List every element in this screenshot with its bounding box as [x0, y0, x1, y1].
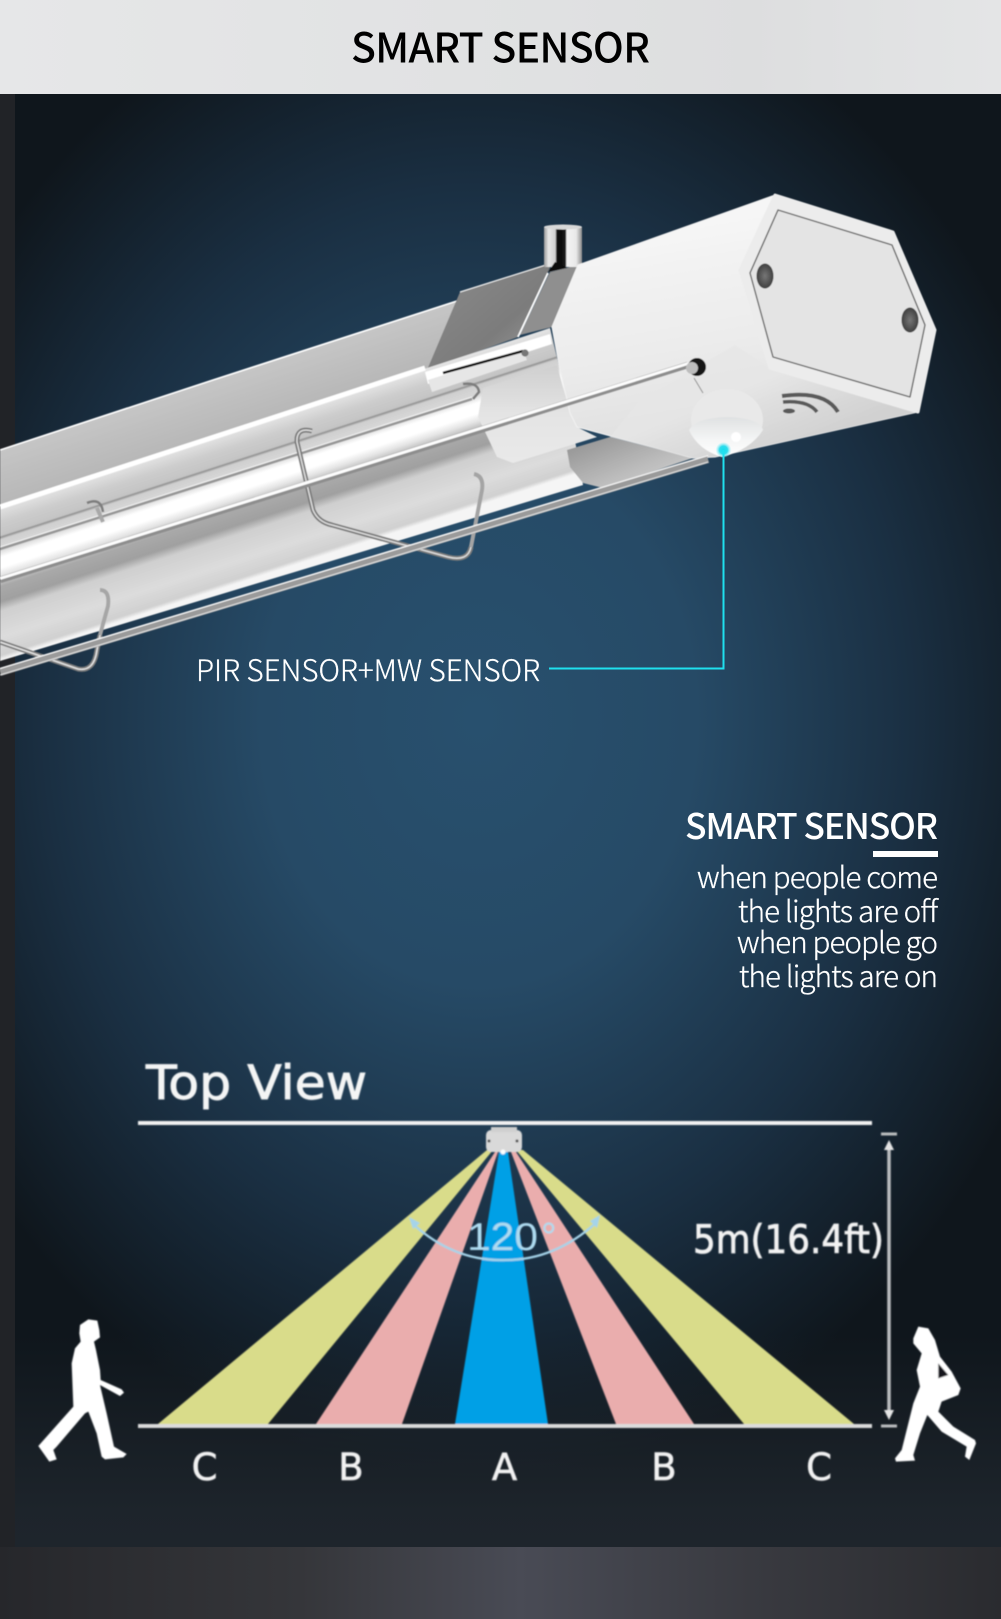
- housing underside: [610, 345, 918, 458]
- sensor icon: [486, 1127, 522, 1154]
- sensor glow: [716, 442, 732, 458]
- 120 degree arc: [409, 1215, 600, 1260]
- block body: the lights are off: [738, 889, 939, 931]
- zone labels: C: [192, 1446, 217, 1489]
- screw holes: [756, 264, 918, 332]
- top white strip: [0, 334, 552, 507]
- left side strip: [0, 94, 15, 1547]
- heading underline: [873, 851, 938, 857]
- PIR sensor dome: [689, 389, 763, 457]
- icon: walking person with bag right: [895, 1327, 976, 1462]
- zone labels: B: [338, 1446, 364, 1489]
- reflector bracket: [427, 263, 578, 370]
- block body: [697, 855, 939, 996]
- floor line: [138, 1424, 872, 1428]
- block body: when people go: [737, 920, 938, 962]
- small hooks: [87, 384, 479, 522]
- ceiling line: [138, 1121, 872, 1125]
- wifi icon: [782, 395, 838, 414]
- housing end face: [740, 195, 935, 412]
- zone labels: C: [806, 1446, 832, 1489]
- block body: the lights are on: [739, 954, 938, 996]
- thin inner rail: [0, 397, 472, 549]
- tube end cap A: [478, 365, 597, 463]
- block heading: SMART SENSOR: [685, 799, 938, 850]
- angle label: 120: [467, 1216, 538, 1259]
- zone labels: A: [492, 1446, 517, 1489]
- callout leader line: [549, 450, 724, 668]
- text block: smart sensor: [685, 799, 939, 996]
- block body: when people come: [697, 855, 938, 897]
- tube body: [0, 328, 583, 661]
- reflector plate: [0, 300, 460, 510]
- product: linear light fixture with sensor: [0, 195, 935, 675]
- diagram title: Top View: [145, 1056, 367, 1111]
- callout label: PIR SENSOR+MW SENSOR: [196, 648, 540, 690]
- white housing: [552, 195, 935, 458]
- angle label: °: [541, 1216, 557, 1259]
- tube end cap B: [567, 437, 693, 488]
- wire cage U bracket: [0, 430, 482, 669]
- front rod: [0, 358, 706, 580]
- icon: walking person left: [38, 1319, 127, 1462]
- zone labels: B: [651, 1446, 677, 1489]
- height dimension: [881, 1134, 897, 1426]
- height label: 5m(16.4ft): [693, 1218, 884, 1263]
- title: SMART SENSOR: [351, 14, 650, 74]
- lower wire rod: [0, 456, 708, 675]
- top view diagram: [38, 1056, 976, 1489]
- detection beams: [158, 1150, 854, 1424]
- mounting pin: [544, 224, 582, 272]
- header bar: [0, 0, 1001, 94]
- bottom band: [0, 1547, 1001, 1619]
- zone labels: [192, 1446, 832, 1489]
